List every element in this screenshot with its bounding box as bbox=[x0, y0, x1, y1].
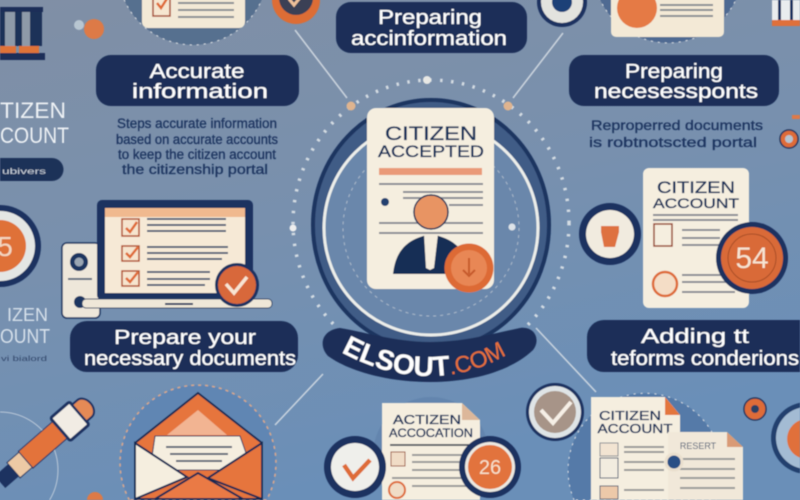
text block: preparing documents description: Reproperred documents bbox=[591, 118, 763, 133]
faint arc around pen bbox=[0, 412, 58, 500]
laptop checklist bbox=[82, 200, 272, 308]
heading pill: accurate information: information bbox=[132, 81, 268, 103]
icon: pen bbox=[0, 392, 100, 493]
text block: citizen account lower left bbox=[0, 305, 50, 363]
icon: small coins bbox=[74, 19, 104, 39]
heading pill: preparing accurate information: Preparing bbox=[378, 7, 482, 29]
document heading: ACTIZEN bbox=[393, 412, 461, 427]
heading pill: adding terms and conditions: teforms conderions bbox=[611, 348, 799, 370]
icon: bottom orange badge bbox=[459, 436, 521, 498]
heading pill: preparing accurate information: accinformation bbox=[351, 28, 507, 50]
icon: top orange badge bbox=[272, 0, 320, 24]
heading pill: prepare your necessary documents: necessary documents bbox=[84, 348, 296, 370]
icon: large check badge bbox=[526, 383, 584, 441]
top left dashed circle bbox=[118, 0, 268, 45]
heading pill: preparing necessary documents: Preparing bbox=[625, 61, 723, 83]
citizen account document: ACCOUNT bbox=[653, 196, 739, 211]
text block: citizen account upper left: COUNT bbox=[0, 123, 69, 148]
bottom right documents bbox=[568, 393, 743, 500]
document heading: CITIZEN bbox=[385, 123, 477, 145]
text block: citizen account lower left: vi bialord bbox=[1, 354, 47, 363]
text block: citizen account upper left bbox=[0, 98, 69, 148]
text block: accurate information description: to keep the citizen account bbox=[118, 147, 276, 162]
heading pill: preparing necessary documents bbox=[569, 55, 779, 106]
right side small marks bbox=[780, 115, 800, 148]
second sheet bbox=[668, 432, 743, 500]
checklist rows bbox=[122, 219, 228, 286]
bottom middle document bbox=[373, 397, 489, 500]
top right document fragment bbox=[593, 0, 743, 43]
icon: left building bbox=[0, 7, 45, 60]
text block: citizen account lower left: IZEN bbox=[7, 305, 48, 325]
text block: accurate information description bbox=[116, 116, 278, 177]
bottom right documents: ACCOUNT bbox=[598, 422, 673, 436]
heading pill: accurate information bbox=[96, 55, 299, 106]
text block: accurate information description: based on accurate accounts bbox=[116, 132, 278, 147]
text block: preparing documents description bbox=[589, 118, 763, 150]
icon: orange 54 badge bbox=[716, 222, 788, 294]
wax seal bbox=[444, 244, 494, 292]
small pill: upper left bbox=[0, 158, 64, 181]
small orange marker bottom bbox=[87, 492, 103, 500]
icon: right edge badge bbox=[771, 403, 800, 473]
top left document fragment bbox=[142, 0, 245, 28]
portrait bbox=[393, 195, 470, 274]
central document: citizen accepted bbox=[367, 108, 494, 289]
citizen account document bbox=[643, 168, 749, 308]
icon: orange check badge bbox=[215, 263, 259, 307]
logo text: ELSOUT.COM bbox=[342, 335, 506, 378]
icon: bottom check badge bbox=[324, 436, 386, 498]
icon: right building bbox=[772, 0, 800, 26]
bottom middle document: ACCOCATION bbox=[389, 426, 473, 440]
icon: device stand bbox=[62, 243, 100, 318]
text block: accurate information description: the citizenship portal bbox=[122, 162, 268, 177]
central document: citizen accepted: ACCEPTED bbox=[378, 142, 484, 161]
heading pill: adding terms and conditions: Adding tt bbox=[641, 326, 750, 348]
small pill: upper left: ubivers bbox=[2, 167, 46, 176]
icon: orange 54 badge: 54 bbox=[735, 242, 769, 275]
heading pill: accurate information: Accurate bbox=[150, 61, 244, 83]
envelope with dashed circle bbox=[120, 385, 276, 500]
heading pill: adding terms and conditions bbox=[587, 320, 800, 372]
icon: small orange dot bbox=[744, 398, 766, 420]
icon: bottom orange badge: 26 bbox=[479, 457, 501, 479]
icon: left partial badge bbox=[0, 205, 41, 287]
logo banner bbox=[322, 318, 576, 396]
text block: preparing documents description: is robtnotscted portal bbox=[589, 135, 757, 150]
central seal ring bbox=[290, 76, 569, 366]
second sheet: RESERT bbox=[680, 441, 717, 451]
heading pill: preparing accurate information bbox=[336, 2, 527, 53]
text block: accurate information description: Steps accurate information bbox=[117, 116, 277, 131]
heading pill: preparing necessary documents: necesessponts bbox=[594, 81, 758, 103]
heading pill: prepare your necessary documents bbox=[70, 321, 298, 372]
connector lines bbox=[275, 30, 596, 425]
document heading: CITIZEN bbox=[599, 408, 661, 423]
text block: citizen account upper left: TIZEN bbox=[0, 98, 66, 123]
document heading: CITIZEN bbox=[657, 178, 735, 197]
icon: left document badge bbox=[579, 203, 641, 265]
letter bbox=[150, 436, 252, 470]
text block: citizen account lower left: OUNT bbox=[0, 326, 50, 348]
heading pill: prepare your necessary documents: Prepare your bbox=[114, 327, 256, 349]
icon: top right seal badge bbox=[537, 0, 587, 27]
